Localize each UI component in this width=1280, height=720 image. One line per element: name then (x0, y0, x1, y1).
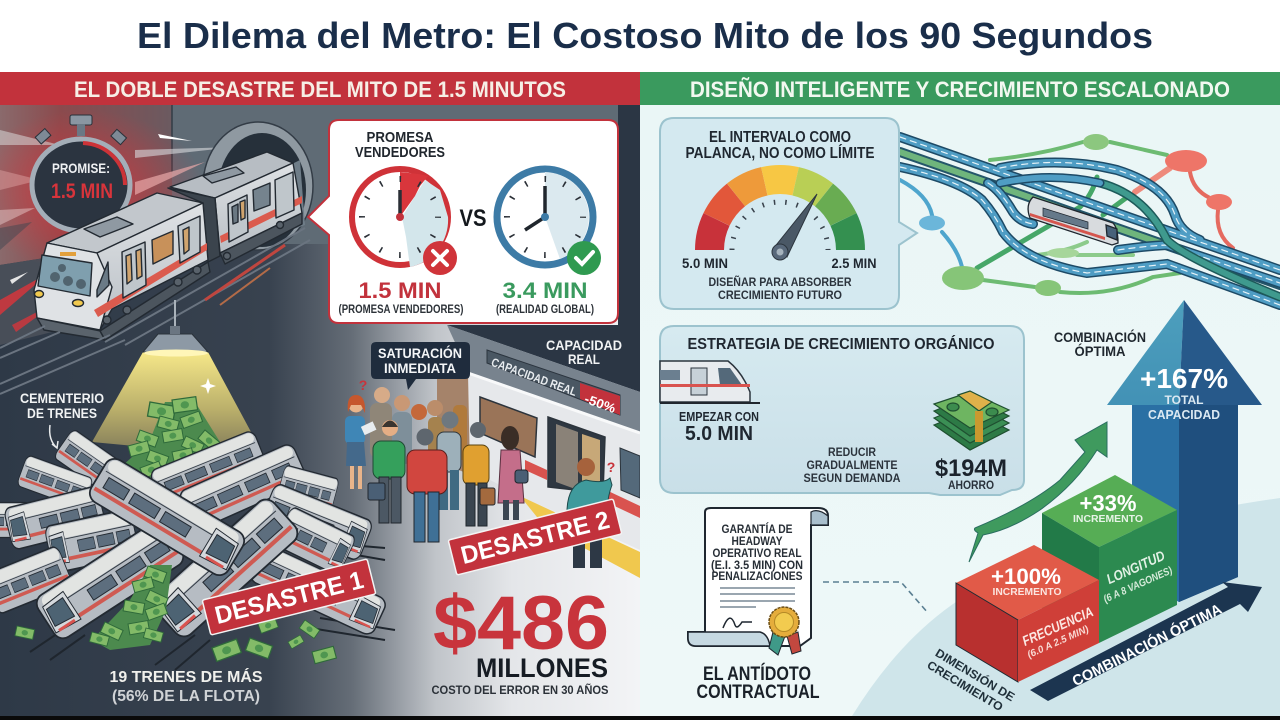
tunnel portal (203, 122, 313, 250)
label: promesa vendedores: VENDEDORES (355, 144, 445, 161)
bellows (168, 188, 220, 262)
icon: banknote stack (934, 391, 1009, 450)
gauge range labels (682, 256, 876, 271)
text: start at 5 min (679, 410, 759, 445)
block: frecuencia: FRECUENCIA (1020, 603, 1096, 649)
text: reduce gradually: SEGUN DEMANDA (804, 471, 901, 485)
gauge heading: PALANCA, NO COMO LÍMITE (686, 145, 874, 162)
stat: $486 millones: COSTO DEL ERROR EN 30 AÑOS (432, 682, 608, 697)
question marks: ? (607, 459, 615, 475)
label: cementerio de trenes (20, 391, 104, 448)
red header: left (0, 72, 640, 105)
callout: promise vs reality (308, 120, 618, 323)
rail tracks under train (0, 228, 310, 394)
icon: red cross badge (423, 241, 457, 275)
network nodes (919, 134, 1232, 296)
organic heading: ESTRATEGIA DE CRECIMIENTO ORGÁNICO (688, 334, 994, 353)
gauge ticks (732, 202, 828, 250)
callout: saturacion inmediata: SATURACIÓN (378, 344, 462, 361)
label: el antidoto contractual: CONTRACTUAL (696, 682, 820, 703)
real value: (REALIDAD GLOBAL) (496, 304, 594, 316)
question marks: ? (359, 377, 367, 393)
capacity real band: -50% (583, 391, 618, 416)
block: longitud (1042, 475, 1177, 643)
gauge heading (686, 129, 874, 162)
block: frecuencia: (6.0 A 2.5 MIN) (1026, 624, 1091, 661)
panel: right, intelligent design (640, 72, 1280, 716)
question marks (359, 377, 615, 475)
icon: side view train (660, 361, 760, 404)
arrow value: +167% (1140, 363, 1228, 394)
contract text: OPERATIVO REAL (712, 548, 802, 560)
pile of money: lower (15, 565, 336, 664)
text: reduce gradually: GRADUALMENTE (806, 458, 898, 472)
label: el antidoto contractual: EL ANTÍDOTO (703, 663, 811, 685)
stat: $486 millones (432, 581, 609, 697)
block: frecuencia: INCREMENTO (992, 586, 1062, 598)
label: capacidad real: CAPACIDAD (546, 337, 622, 353)
stat: 19 trenes de mas (110, 667, 263, 705)
stat: $486 millones: $486 (433, 581, 609, 666)
contract text: (E.I. 3.5 MIN) CON (711, 560, 803, 572)
signature (723, 618, 752, 628)
contract text: GARANTÍA DE (722, 523, 793, 536)
arrow value: CAPACIDAD (1148, 408, 1220, 422)
capacity real band (487, 350, 620, 416)
chart: rail network map (900, 134, 1280, 305)
main train atop pile (86, 455, 248, 579)
gauge needle (772, 194, 817, 260)
person: man in yellow (463, 422, 495, 526)
stat: 19 trenes de mas: 19 TRENES DE MÁS (110, 667, 263, 686)
chart: 3D growth blocks and arrow (925, 300, 1262, 714)
speed streaks (0, 110, 235, 332)
arrow value: TOTAL (1164, 393, 1204, 407)
label: dimension de crecimiento: CRECIMIENTO (925, 658, 1005, 714)
green header: right: DISEÑO INTELIGENTE Y CRECIMIENTO ESCALONADO (690, 77, 1230, 102)
title band: El Dilema del Metro: El Costoso Mito de los 90 Segundos (137, 15, 1153, 56)
crowd of passengers (345, 377, 615, 568)
back row (370, 387, 467, 464)
person: woman in pink (498, 426, 528, 520)
label: cementerio de trenes: CEMENTERIO (20, 391, 104, 406)
bottom letterbox strip (0, 716, 1280, 720)
icon: stopwatch: 1.5 MIN (51, 180, 113, 203)
label: combinacion optima top: COMBINACIÓN (1054, 328, 1146, 345)
stat: savings: AHORRO (948, 478, 994, 492)
gauge dial (710, 180, 850, 250)
promised value: (PROMESA VENDEDORES) (338, 304, 464, 316)
vs label: VS (460, 205, 486, 232)
gauge caption: CRECIMIENTO FUTURO (718, 288, 842, 302)
block: longitud: (6 A 8 VAGONES) (1102, 564, 1175, 606)
tag: desastre 2: DESASTRE 2 (458, 506, 612, 570)
rails below pile (30, 545, 395, 670)
label: capacidad real: REAL (568, 351, 600, 367)
title band (0, 0, 1280, 72)
text: reduce gradually: REDUCIR (828, 445, 876, 459)
icon: stopwatch (32, 115, 130, 231)
callout: saturacion inmediata (371, 342, 470, 390)
contract text: PENALIZACIONES (712, 571, 803, 583)
green trend arrow (969, 422, 1107, 562)
capacity real band: CAPACIDAD REAL (489, 355, 579, 399)
gauge caption: DISEÑAR PARA ABSORBER (708, 274, 852, 289)
contract scroll (688, 508, 828, 655)
stat: $486 millones: MILLONES (476, 653, 608, 683)
block: longitud: LONGITUD (1104, 547, 1167, 587)
red header: left: EL DOBLE DESASTRE DEL MITO DE 1.5 MINUTOS (74, 77, 566, 102)
label: combinacion optima top (1054, 328, 1146, 359)
lamp with light cone (92, 300, 265, 458)
green header: right (640, 72, 1280, 105)
platform train (437, 325, 640, 578)
promised value: 1.5 MIN (358, 278, 442, 303)
gauge range labels: 2.5 MIN (832, 256, 876, 271)
contract text: HEADWAY (732, 536, 783, 548)
panel: gauge card (660, 118, 917, 309)
label: el antidoto contractual (696, 663, 820, 703)
block: frecuencia (956, 545, 1099, 682)
block: longitud: INCREMENTO (1073, 513, 1143, 525)
icon: stopwatch: PROMISE: (52, 160, 110, 176)
real value: 3.4 MIN (502, 278, 588, 303)
first car (34, 193, 284, 340)
label: capacidad real (546, 337, 622, 367)
big blue arrow (1107, 300, 1262, 602)
person: man in teal (567, 458, 612, 568)
icon: green check badge (567, 241, 601, 275)
gauge caption (708, 274, 852, 302)
second car (170, 152, 302, 264)
stat: 19 trenes de mas: (56% DE LA FLOTA) (112, 688, 260, 705)
train cemetery pile (0, 428, 388, 642)
network branch lines (900, 142, 1233, 293)
text: reduce gradually (804, 445, 901, 485)
dashed connector (823, 582, 928, 613)
label: combinacion optima top: ÓPTIMA (1074, 342, 1126, 359)
combinacion optima axis arrow: COMBINACIÓN ÓPTIMA (1069, 600, 1225, 690)
pile of money: upper (110, 397, 228, 500)
label: dimension de crecimiento: DIMENSIÓN DE (933, 645, 1018, 704)
icon: broken clock 1.5 min (352, 169, 448, 267)
panel: left, the double disaster (0, 72, 640, 716)
arrow value (1140, 363, 1228, 422)
real value (496, 278, 594, 316)
gauge range labels: 5.0 MIN (682, 256, 728, 271)
tag: desastre 1: DESASTRE 1 (212, 566, 366, 630)
contract text (711, 523, 803, 583)
icon: small train (1028, 197, 1118, 245)
person: man in red (407, 428, 447, 542)
train entering tunnel (34, 152, 302, 340)
block: frecuencia: +100% (991, 564, 1061, 589)
person: man in grey (437, 412, 461, 510)
label: promesa vendedores: PROMESA (366, 129, 434, 146)
gauge heading: EL INTERVALO COMO (709, 129, 851, 146)
person: woman in blue (345, 395, 376, 489)
person: man in green (368, 420, 405, 523)
icon: clock 3.4 min (497, 169, 593, 265)
panel: organic growth card (660, 326, 1024, 495)
contract lines (720, 588, 795, 607)
text: start at 5 min: EMPEZAR CON (679, 410, 759, 424)
icon: seal with ribbon (769, 607, 801, 655)
main track bundle (900, 137, 1280, 305)
promised value (338, 278, 464, 316)
combinacion optima axis arrow (1030, 582, 1262, 701)
label: cementerio de trenes: DE TRENES (27, 406, 97, 421)
block: longitud: +33% (1080, 490, 1136, 516)
label: promesa vendedores (355, 129, 445, 161)
stat: savings: $194M (935, 455, 1007, 482)
callout: saturacion inmediata: INMEDIATA (384, 360, 456, 376)
text: start at 5 min: 5.0 MIN (685, 423, 753, 445)
